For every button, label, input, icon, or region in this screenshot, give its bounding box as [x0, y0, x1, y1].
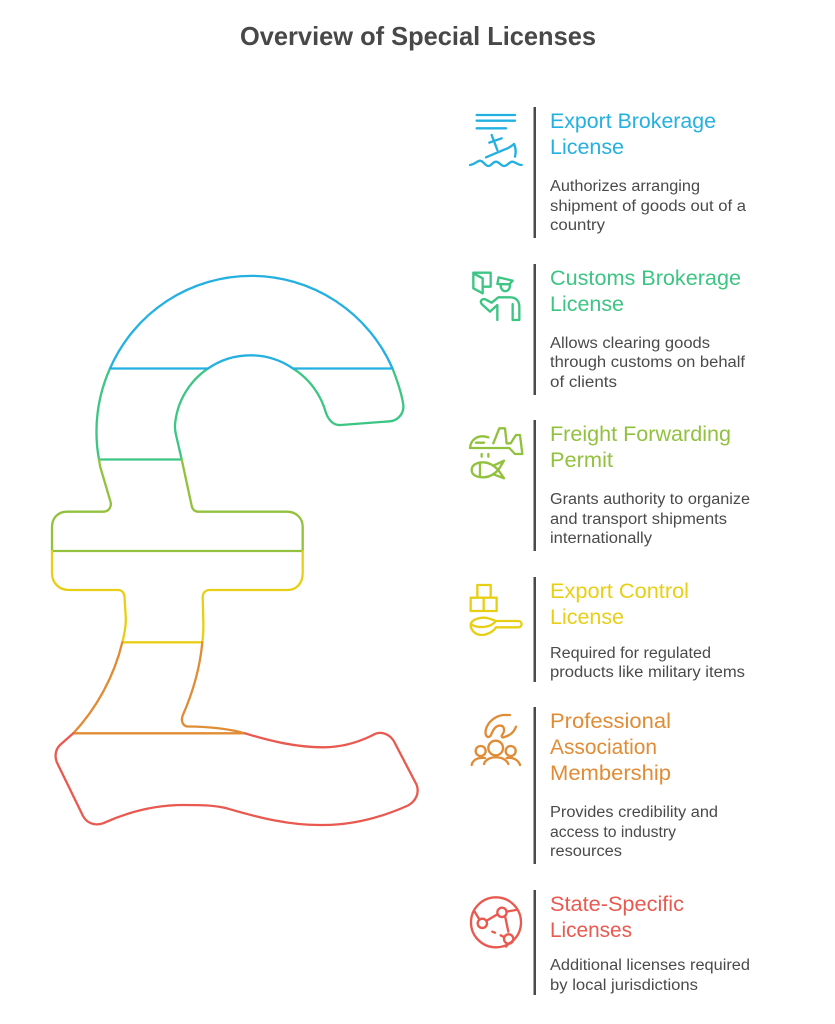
- description: of clients: [550, 374, 617, 391]
- heading: Freight Forwarding: [550, 422, 731, 446]
- list item: state-specific: [471, 890, 750, 995]
- divider: [534, 707, 536, 864]
- list item: export brokerage: [470, 107, 747, 238]
- title: Overview of Special Licenses: [240, 21, 596, 51]
- heading: License: [550, 605, 624, 629]
- heading: State-Specific: [550, 892, 684, 916]
- heading: Permit: [550, 448, 613, 472]
- divider: [534, 890, 536, 995]
- description: Allows clearing goods: [550, 335, 710, 352]
- list item: professional association: [472, 707, 718, 864]
- description: resources: [550, 843, 622, 860]
- heading: Professional: [550, 709, 671, 733]
- heading: Association: [550, 735, 657, 759]
- description: internationally: [550, 530, 652, 547]
- description: Provides credibility and: [550, 804, 718, 821]
- heading: Export Brokerage: [550, 109, 716, 133]
- description: Grants authority to organize: [550, 491, 750, 508]
- description: Additional licenses required: [550, 957, 750, 974]
- divider: [534, 264, 536, 395]
- icon: ship: [470, 115, 522, 166]
- segment: customs brokerage: [96, 368, 403, 460]
- description: through customs on behalf: [550, 354, 746, 371]
- list item: customs brokerage: [473, 264, 746, 395]
- description: Authorizes arranging: [550, 178, 700, 195]
- heading: License: [550, 135, 624, 159]
- divider: [534, 577, 536, 682]
- description: access to industry: [550, 824, 676, 841]
- description: country: [550, 217, 605, 234]
- heading: License: [550, 292, 624, 316]
- description: Required for regulated: [550, 645, 711, 662]
- segment: state-specific: [56, 733, 418, 825]
- icon: boxes and scoop: [471, 585, 522, 635]
- icon: group with hand: [472, 715, 520, 765]
- heading: Membership: [550, 761, 671, 785]
- heading: Licenses: [550, 918, 632, 942]
- description: shipment of goods out of a: [550, 198, 747, 215]
- list item: freight forwarding: [470, 420, 750, 551]
- icon: plane and bomb: [470, 428, 522, 478]
- segment: freight forwarding: [52, 460, 303, 551]
- pound sign diagram: [52, 276, 418, 825]
- icon: network globe: [471, 897, 521, 947]
- description: and transport shipments: [550, 511, 727, 528]
- segment: professional association: [73, 642, 245, 733]
- heading: Customs Brokerage: [550, 266, 741, 290]
- heading: Export Control: [550, 579, 689, 603]
- segment: export control: [52, 551, 303, 642]
- description: by local jurisdictions: [550, 977, 698, 994]
- list item: export control: [471, 577, 745, 682]
- divider: [534, 107, 536, 238]
- divider: [534, 420, 536, 551]
- icon: customs officer: [473, 273, 519, 320]
- description: products like military items: [550, 664, 745, 681]
- segment: export brokerage: [110, 276, 392, 368]
